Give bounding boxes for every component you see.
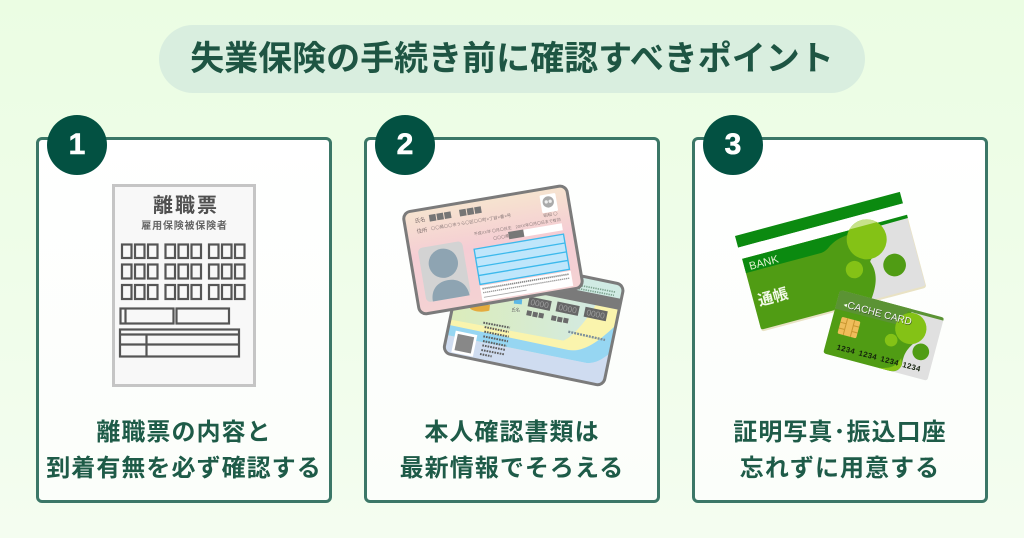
passbook: BANK	[748, 253, 781, 273]
caption 2: 最新情報でそろえる	[400, 455, 624, 482]
title: 失業保険の手続き前に確認すべきポイント	[190, 40, 834, 78]
caption 3	[733, 419, 947, 482]
caption 2	[400, 419, 624, 482]
cash card: CACHE CARD	[847, 301, 913, 329]
icon: separation notice document	[114, 186, 254, 386]
back of card: 0000	[558, 302, 578, 316]
panel: separation notice	[36, 137, 332, 503]
icon: bank passbook and cash card	[735, 191, 944, 381]
icon: separation notice document: 雇用保険被保険者	[141, 219, 228, 232]
panel: identity documents	[364, 137, 660, 503]
back of card: 0000	[530, 297, 550, 311]
number badge 3	[703, 115, 763, 175]
cash card: CACHE CARD	[846, 300, 913, 328]
caption 2: 本人確認書類は	[424, 419, 600, 446]
caption 3: 証明写真･振込口座	[733, 419, 947, 446]
passbook	[735, 191, 927, 332]
front of card: 氏名	[414, 215, 426, 225]
caption 3: 忘れずに用意する	[740, 455, 940, 482]
front of card: 住所	[416, 225, 428, 235]
front of card	[403, 185, 583, 315]
icon: identity cards	[402, 184, 624, 386]
back of card: 氏名	[511, 307, 520, 314]
cash card	[823, 290, 944, 381]
front of card: 〇〇〇県	[493, 232, 509, 241]
caption 1	[46, 419, 322, 482]
caption 1: 離職票の内容と	[96, 419, 272, 446]
front of card: 平成XX年 〇月〇日生 20XX年〇月〇日まで有効	[473, 216, 561, 236]
number badge 2	[375, 115, 435, 175]
caption 1: 到着有無を必ず確認する	[46, 455, 322, 482]
back of card	[442, 274, 624, 386]
front of card: 〇〇県〇〇市うら〇区〇〇町×丁目×番×号	[430, 212, 512, 232]
passbook: 通帳	[756, 284, 791, 310]
back of card: 0000	[586, 307, 606, 321]
panel: photo and bank account	[692, 137, 988, 503]
title pill	[159, 25, 865, 93]
number badge 1	[47, 115, 107, 175]
front of card: 昭和 〇	[543, 210, 559, 219]
number badge 1: 1	[69, 128, 85, 161]
cash card: 1234 1234 1234 1234	[836, 343, 922, 374]
number badge 2: 2	[397, 128, 413, 161]
number badge 3: 3	[725, 128, 741, 161]
icon: separation notice document: 離職票	[153, 194, 219, 217]
